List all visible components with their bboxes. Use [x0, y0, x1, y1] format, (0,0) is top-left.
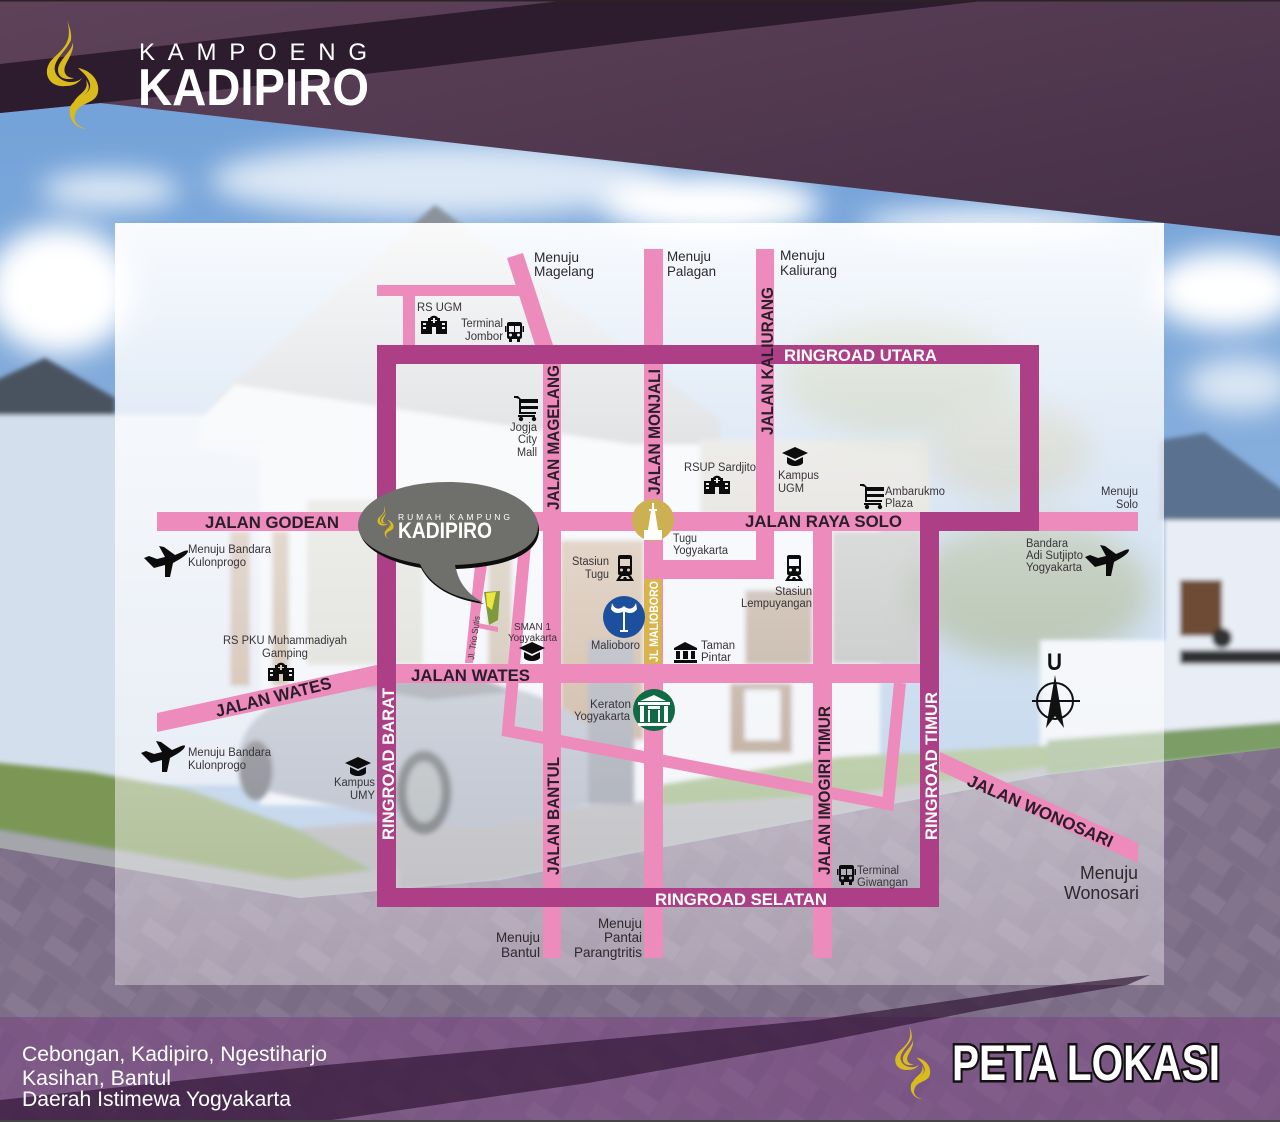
icons: shopping carts [514, 396, 884, 509]
landmark labels: Keraton [590, 699, 631, 711]
road labels: JALAN MONJALI [645, 369, 664, 495]
bottom banner with dark diagonal [0, 975, 1280, 1122]
road labels: JALAN GODEAN [205, 513, 339, 532]
landmark labels: Yogyakarta [508, 633, 557, 644]
white translucent map panel [115, 223, 1164, 985]
landmark labels: Pintar [701, 652, 731, 664]
road labels: JALAN KALIURANG [758, 287, 777, 435]
address block: Kasihan, Bantul [22, 1067, 171, 1090]
Peta Lokasi title with flame: PETA LOKASI [952, 1035, 1220, 1091]
landmark labels: Yogyakarta [574, 711, 631, 723]
landmark labels: Bantul [501, 944, 540, 960]
address block: Daerah Istimewa Yogyakarta [22, 1088, 291, 1111]
road labels: RINGROAD BARAT [379, 687, 398, 840]
landmark labels: Stasiun [572, 556, 609, 568]
landmark labels: Giwangan [857, 877, 908, 889]
landmark labels: Kampus [334, 777, 375, 789]
landmark labels: Magelang [534, 263, 594, 279]
landmark: Keraton Yogyakarta [633, 689, 675, 731]
icons: buses [505, 322, 856, 885]
landmark labels: Menuju [534, 249, 579, 265]
landmark labels: Adi Sutjipto [1026, 550, 1083, 562]
landmark labels: Ambarukmo [885, 486, 945, 498]
landmark labels: Plaza [885, 498, 914, 510]
landmark labels: UGM [778, 483, 804, 495]
landmark: Malioboro lamp [603, 596, 645, 638]
speech bubble with Kadipiro logo: RUMAH KAMPUNG [398, 512, 510, 522]
road labels: JALAN WONOSARI [964, 771, 1116, 851]
landmark labels: RS UGM [417, 302, 462, 314]
landmark labels: Menuju [780, 247, 825, 263]
Peta Lokasi title with flame [895, 1025, 1220, 1099]
Jalan Malioboro gold segment: JL MALIOBORO [647, 581, 661, 662]
road labels: JALAN RAYA SOLO [745, 512, 902, 531]
landmark labels [188, 247, 1139, 960]
landmark labels: Tugu [673, 533, 697, 545]
landmark labels: Kampus [778, 470, 819, 482]
site plan marker [484, 591, 500, 625]
icons: graduation caps [345, 447, 808, 776]
landmark labels: RS PKU Muhammadiyah [223, 635, 347, 647]
icon: museum Taman Pintar [674, 642, 697, 663]
landmark labels: Menuju Bandara [188, 747, 272, 759]
landmark labels: Terminal [857, 865, 899, 877]
landmark labels: Lempuyangan [741, 598, 812, 610]
north compass: U [1047, 649, 1062, 676]
landmark labels: Malioboro [591, 640, 640, 652]
road labels: RINGROAD UTARA [784, 346, 937, 365]
icons: trains [616, 555, 803, 581]
landmark labels: Menuju [1080, 863, 1138, 883]
road labels: JALAN IMOGIRI TIMUR [815, 706, 834, 875]
road labels: RINGROAD SELATAN [655, 890, 827, 909]
speech bubble with Kadipiro logo [358, 482, 539, 604]
road labels: Jl. Trio Sutis [466, 615, 482, 660]
icons: hospitals [268, 316, 730, 681]
landmark labels: Menuju [667, 248, 711, 264]
road labels: JALAN BANTUL [544, 757, 563, 875]
address block: Cebongan, Kadipiro, Ngestiharjo [22, 1043, 327, 1066]
landmark labels: Terminal [461, 318, 503, 330]
road labels: RINGROAD TIMUR [922, 692, 941, 840]
road labels: JALAN MAGELANG [544, 365, 563, 510]
landmark labels: Parangtritis [574, 944, 642, 960]
landmark labels: Kaliurang [780, 262, 837, 278]
brand title: KAMPOENG [139, 39, 367, 66]
road labels: JALAN WATES [411, 666, 530, 685]
landmark labels: Jogja [510, 422, 538, 434]
top banner [0, 0, 1280, 236]
icons: airplanes [141, 545, 1129, 772]
landmark labels: Wonosari [1064, 883, 1139, 903]
landmark labels: UMY [350, 790, 375, 802]
landmark labels: SMAN 1 [514, 622, 551, 633]
landmark labels: Menuju Bandara [188, 544, 272, 556]
landmark labels: Pantai [604, 929, 642, 945]
landmark labels: Kulonprogo [188, 557, 246, 569]
landmark labels: Tugu [585, 569, 609, 581]
landmark labels: Taman [701, 640, 735, 652]
landmark: Tugu Yogyakarta [632, 499, 674, 541]
address block [22, 1043, 327, 1111]
brand title [138, 39, 369, 117]
landmark labels: Yogyakarta [673, 545, 729, 557]
north compass [1032, 649, 1080, 728]
landmark labels: Kulonprogo [188, 760, 246, 772]
road labels [205, 287, 1116, 909]
road labels: JALAN WATES [213, 674, 333, 721]
landmark labels: Gamping [262, 648, 308, 660]
landmark labels: Stasiun [775, 586, 812, 598]
landmark labels: Menuju [1101, 486, 1138, 498]
landmark labels: City [518, 434, 537, 446]
landmark labels: Bandara [1026, 538, 1069, 550]
landmark labels: Menuju [496, 929, 540, 945]
speech bubble with Kadipiro logo: KADIPIRO [398, 518, 492, 543]
landmark labels: Solo [1116, 499, 1138, 511]
logo flame [47, 20, 98, 129]
landmark labels: RSUP Sardjito [684, 462, 756, 474]
landmark labels: Mall [517, 447, 537, 459]
brand title: KADIPIRO [138, 59, 369, 117]
ring road [377, 345, 1039, 907]
landmark labels: Yogyakarta [1026, 562, 1083, 574]
landmark labels: Menuju [598, 915, 642, 931]
landmark labels: Palagan [667, 263, 716, 279]
landmark labels: Jombor [465, 331, 503, 343]
road network: local pink roads [157, 249, 1138, 958]
